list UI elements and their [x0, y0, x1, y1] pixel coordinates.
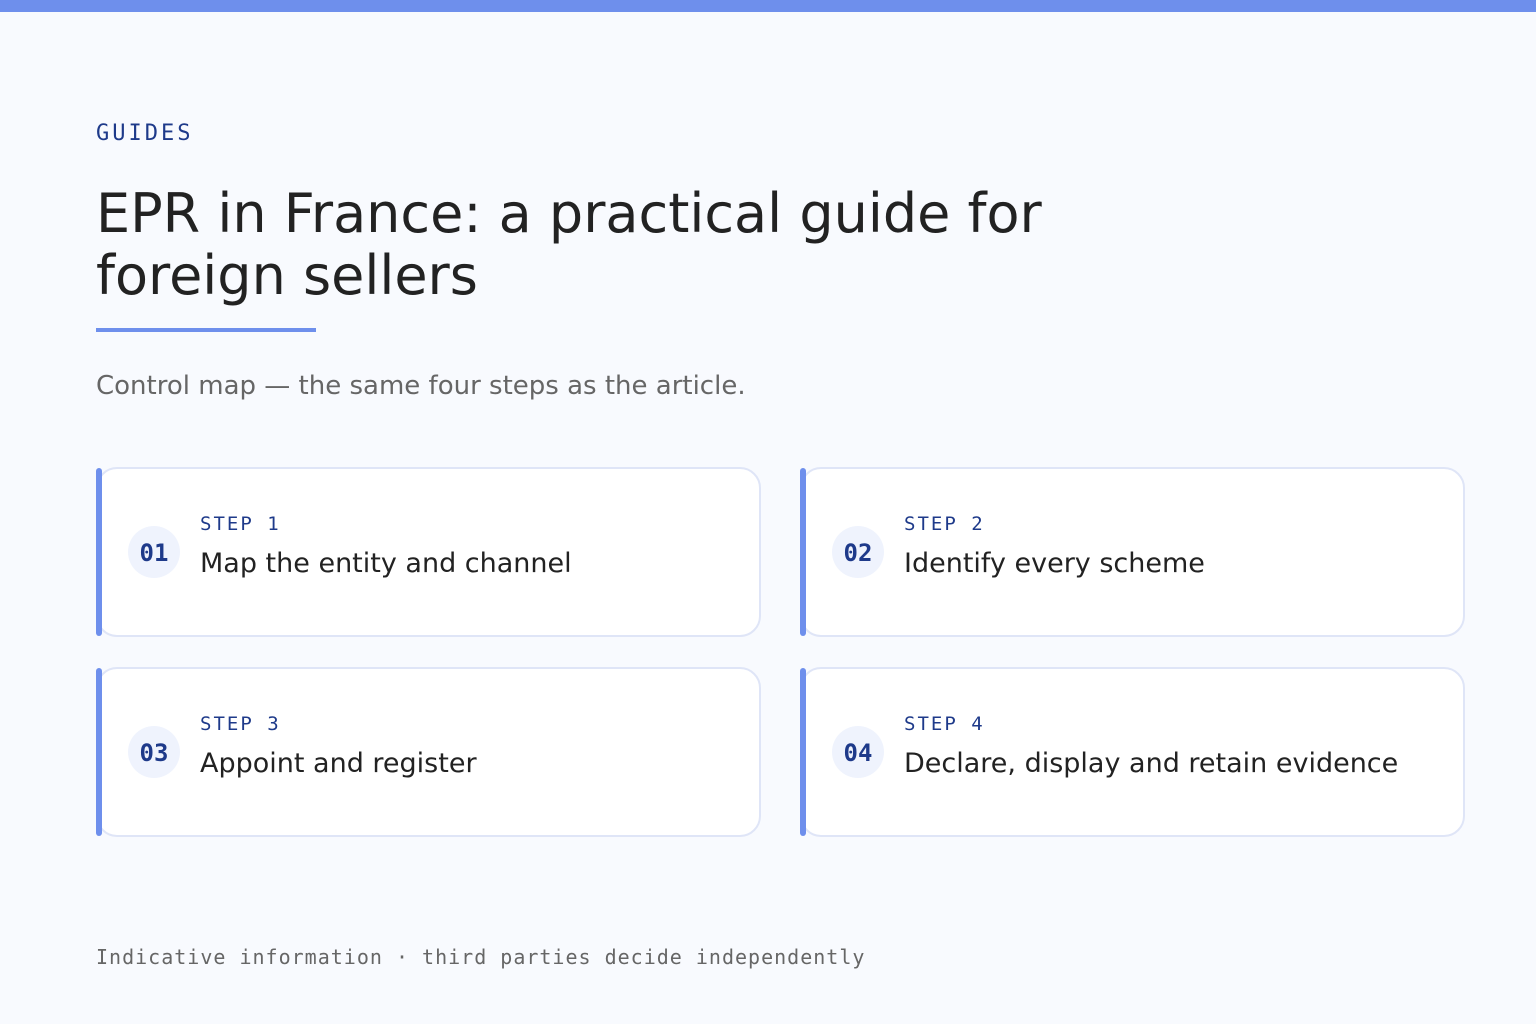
panel: step 1: STEP 1 [200, 513, 281, 535]
footer note: Indicative information · third parties decide independently [96, 945, 865, 969]
eyebrow: guides: GUIDES [96, 121, 193, 146]
title: EPR in France: a practical guide for [96, 182, 1043, 245]
panel: step 2: 02 [844, 539, 872, 567]
panel: step 4: Declare, display and retain evidence [904, 748, 1398, 779]
panel: step 1 [96, 468, 760, 636]
panel: step 1: Map the entity and channel [200, 548, 572, 579]
panel: step 3: STEP 3 [200, 713, 281, 735]
panel: step 4 [800, 668, 1464, 836]
panel: step 3 [96, 668, 760, 836]
panel: step 2 [800, 468, 1464, 636]
top accent bar [0, 0, 1536, 12]
subtitle: Control map — the same four steps as the article. [96, 371, 746, 401]
panel: step 4: 04 [844, 739, 872, 767]
title: foreign sellers [96, 244, 478, 307]
panel: step 4: STEP 4 [904, 713, 985, 735]
title underline [96, 328, 316, 332]
panel: step 2: Identify every scheme [904, 548, 1205, 579]
panel: step 2: STEP 2 [904, 513, 985, 535]
panel: step 3: 03 [140, 739, 168, 767]
panel: step 1: 01 [140, 539, 168, 567]
panel: step 3: Appoint and register [200, 748, 477, 779]
